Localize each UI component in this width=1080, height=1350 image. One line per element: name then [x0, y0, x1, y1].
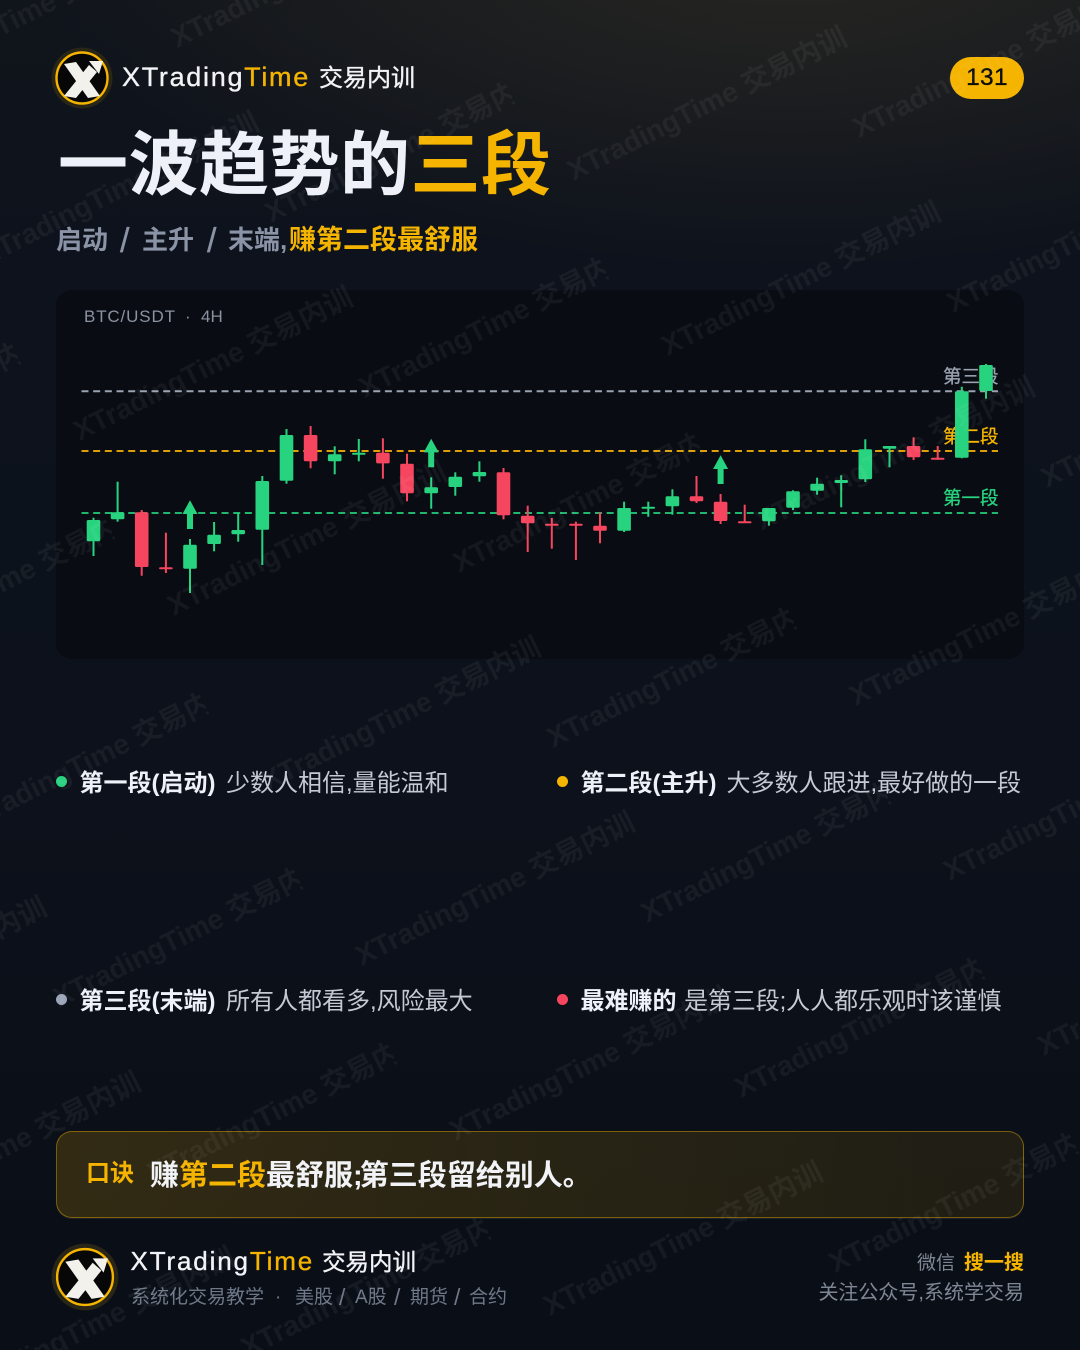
- footer tagline: [131, 1284, 507, 1310]
- point text: 最难赚的 是第三段;人人都乐观时该谨慎: [580, 988, 1001, 1015]
- chart ticker label: ·: [185, 307, 191, 326]
- footer tagline: 系统化交易教学: [131, 1287, 264, 1308]
- point text: 第三段(末端) 所有人都看多,风险最大: [80, 988, 473, 1015]
- green bullet: [56, 776, 67, 786]
- subtitle: 主升: [142, 225, 194, 255]
- subtitle: /: [120, 222, 129, 260]
- level label: stage three: 第三段: [943, 366, 999, 387]
- header brand: [52, 48, 415, 108]
- gray bullet: [56, 994, 67, 1004]
- follow prompt: 关注公众号,系统学交易: [818, 1282, 1024, 1304]
- point: stage three: [56, 988, 473, 1015]
- page number badge: 131: [966, 64, 1008, 91]
- callout: mnemonic: [56, 1131, 1024, 1218]
- page number badge: [950, 57, 1024, 99]
- icon: logo: [52, 48, 112, 108]
- footer brand name: XTradingTime 交易内训: [130, 1246, 416, 1276]
- search prompt: 微信 搜一搜: [917, 1252, 1024, 1274]
- watermark layer: XTradingTime 交易内训: [750, 370, 1040, 536]
- point: stage two: [557, 770, 1021, 797]
- callout tag: 口诀: [86, 1160, 134, 1187]
- watermark layer: XTradingTime 交易内训: [562, 20, 852, 186]
- icon: logo: [52, 1244, 118, 1310]
- level line: stage two: [82, 450, 998, 452]
- footer tagline: /: [454, 1284, 460, 1310]
- footer tagline: 美股: [295, 1287, 333, 1308]
- point: hardest to earn: [557, 988, 1001, 1015]
- brand name: XTradingTime 交易内训: [122, 62, 415, 92]
- watermark layer: XTradingTime 交易内训: [729, 937, 1019, 1103]
- subtitle: 末端,: [228, 225, 287, 255]
- watermark layer: XTradingTime 交易内训: [538, 1155, 828, 1321]
- watermark layer: XTradingTime 交易内训: [656, 195, 946, 361]
- chart ticker label: [84, 307, 223, 326]
- watermark layer: XTradingTime 交易内训: [47, 847, 337, 1013]
- footer tagline: ·: [275, 1287, 281, 1308]
- subtitle: 启动: [56, 225, 108, 255]
- subtitle: [56, 222, 478, 260]
- level label: stage two: 第二段: [943, 426, 999, 447]
- watermark layer: XTradingTime 交易内训: [68, 280, 358, 446]
- level line: stage one: [82, 512, 998, 514]
- watermark layer: XTradingTime 交易内训: [444, 980, 734, 1146]
- point text: 第一段(启动) 少数人相信,量能温和: [80, 770, 449, 797]
- panel: candlestick chart: [56, 290, 1024, 659]
- footer tagline: 合约: [469, 1287, 507, 1308]
- subtitle: /: [207, 222, 216, 260]
- callout text: 赚第二段最舒服;第三段留给别人。: [150, 1160, 592, 1192]
- footer call to action: [818, 1252, 1024, 1304]
- red bullet: [557, 994, 568, 1004]
- footer tagline: /: [394, 1284, 400, 1310]
- level label: stage one: 第一段: [943, 488, 999, 508]
- candlesticks: [87, 364, 993, 593]
- point text: 第二段(主升) 大多数人跟进,最好做的一段: [580, 770, 1021, 797]
- point: stage one: [56, 770, 449, 797]
- watermark layer: XTradingTime 交易内训: [635, 762, 925, 928]
- watermark layer: XTradingTime 交易内训: [259, 62, 549, 228]
- watermark layer: XTradingTime 交易内训: [447, 412, 737, 578]
- arrow: second entry: [424, 439, 439, 467]
- footer tagline: 期货: [410, 1287, 448, 1308]
- arrow: first entry: [182, 500, 198, 529]
- watermark layer: XTradingTime 交易内训: [162, 455, 452, 621]
- watermark layer: XTradingTime 交易内训: [141, 1022, 431, 1188]
- footer tagline: /: [339, 1284, 345, 1310]
- subtitle: 赚第二段最舒服: [289, 225, 478, 255]
- watermark layer: XTradingTime 交易内训: [353, 237, 643, 403]
- chart ticker label: BTC/USDT: [84, 307, 176, 326]
- footer brand: [52, 1244, 507, 1310]
- title: 一波趋势的三段: [58, 126, 552, 204]
- watermark layer: XTradingTime 交易内训: [541, 587, 831, 753]
- chart ticker label: 4H: [201, 307, 223, 326]
- watermark layer: XTradingTime 交易内训: [350, 805, 640, 971]
- level line: stage three: [82, 390, 998, 392]
- arrow: third entry: [713, 455, 728, 484]
- watermark layer: XTradingTime 交易内训: [256, 630, 546, 796]
- footer tagline: A股: [355, 1287, 387, 1308]
- yellow bullet: [557, 776, 568, 786]
